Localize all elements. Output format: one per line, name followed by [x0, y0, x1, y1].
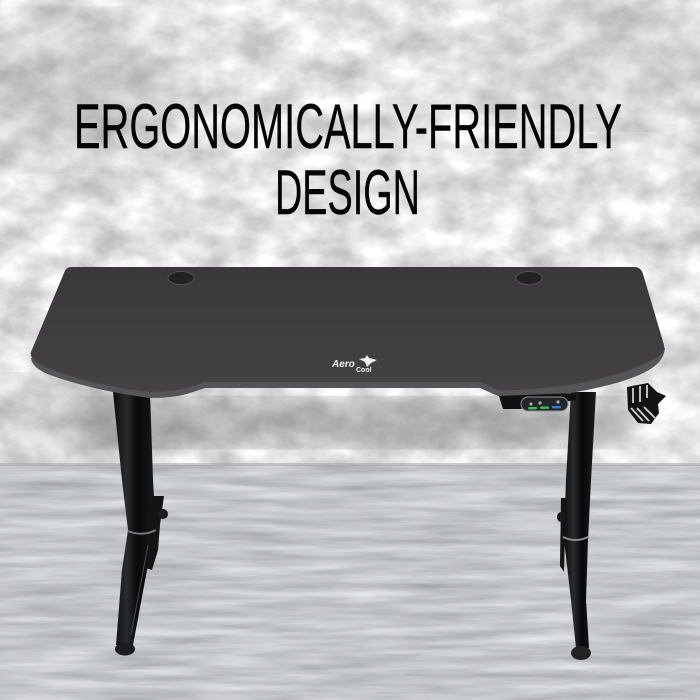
- title: [74, 92, 622, 228]
- brand logo: [331, 355, 377, 374]
- desktop edge: [31, 348, 665, 398]
- background: concrete wall: [0, 0, 700, 470]
- headset hook: [627, 383, 666, 424]
- brand logo: Aero: [331, 359, 355, 370]
- cable grommet right: [516, 272, 542, 284]
- gaming desk: [31, 267, 666, 660]
- desk shadow on wall: [80, 400, 620, 445]
- left leg: [113, 392, 168, 656]
- brand logo: Cool: [356, 367, 372, 374]
- desktop surface: [31, 267, 664, 392]
- control panel: [499, 393, 576, 411]
- background: wooden floor: [0, 463, 700, 700]
- cable grommet left: [168, 272, 194, 284]
- title: DESIGN: [275, 158, 420, 228]
- right leg: [557, 392, 596, 660]
